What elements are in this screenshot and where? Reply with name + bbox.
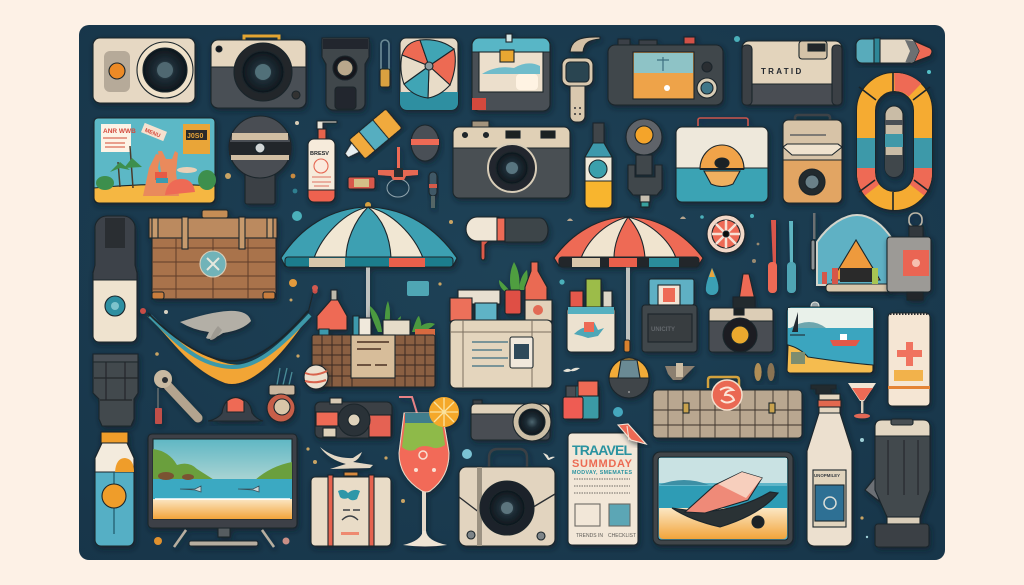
icon: teal beach umbrella (281, 202, 457, 330)
icon: large grey vintage camera (453, 121, 570, 198)
icon: beach poster: ANR WWB (103, 128, 136, 135)
icon: stacked red cards (563, 381, 599, 419)
icon: small marker pen (429, 172, 437, 208)
icon: cocktail glass with citrus (399, 397, 459, 546)
icon: tan camera backpack (783, 115, 842, 203)
decorative dots (154, 36, 931, 545)
icon: martini glass (848, 383, 876, 418)
icon: hammock (140, 288, 318, 384)
icon: seaside card (787, 302, 874, 373)
icon: striped ball (304, 365, 328, 389)
icon: round red shell (707, 215, 745, 253)
icon: boat on beach tablet (653, 452, 793, 545)
icon: first-aid notepad (888, 313, 930, 406)
icon: capsule tube (856, 38, 932, 63)
icon: beige document bag with supplies (450, 262, 552, 388)
icon: flip flops (754, 363, 775, 381)
icon: large cream bottle with label (807, 385, 852, 546)
icon: screen camera (608, 37, 723, 105)
icon: coral beach umbrella (554, 217, 703, 352)
icon: wooden chest (149, 210, 277, 299)
icon: blue tent (811, 213, 892, 292)
icon: large cream bottle with label: UNOPMILEY (814, 473, 840, 478)
icon: small red bar (348, 177, 375, 189)
icon: dark embossed case with cards (642, 279, 697, 352)
icon: wrist watch (562, 37, 600, 122)
icon: travel summary poster: TRAAVEL (572, 442, 632, 458)
icon: beach poster: J0S0 (187, 133, 203, 140)
icon: grey whale (180, 311, 251, 340)
icon: red compact camera (315, 398, 392, 438)
icon: white pipe capsule (466, 217, 548, 260)
icon: two-tone camera with yellow handle (211, 36, 306, 108)
icon: cream suitcase with face (311, 472, 391, 546)
icon: red tool with loop (378, 147, 418, 197)
icon: oval swim ring (859, 73, 930, 211)
icon: large camera with handle (459, 449, 555, 546)
icon: dark round hat (208, 398, 263, 421)
icon: camera lens stack (93, 354, 138, 426)
icon: grey canister device (887, 213, 931, 300)
icon: spiral snail device (267, 368, 295, 422)
icon: dark embossed case with cards: UNICITY (651, 327, 675, 333)
icon: dark flashlight device (322, 38, 369, 110)
icon: small bracket (665, 363, 695, 380)
icon: lotion pump bottle: BRESV (310, 151, 329, 157)
icon: striped sphere on stand (229, 116, 291, 204)
icon: bird plane (320, 447, 373, 469)
icon: travel summary poster: TRENDS IN (576, 533, 603, 539)
icon: rugged camera labelled TRATID: TRATID (761, 67, 804, 76)
icon: small lock tag (380, 40, 390, 87)
icon: small grey camera (471, 400, 551, 441)
icon: dark torch (626, 119, 662, 207)
icon: two paddles (768, 220, 796, 293)
icon: teal flask bottle (95, 432, 134, 546)
icon: travel summary poster: CHECKLIST (608, 533, 636, 539)
icon: beach monitor (148, 434, 297, 547)
icon: lotion pump bottle (308, 121, 337, 202)
icon: travel summary poster: MODVAY, SMEMATES (572, 470, 632, 476)
icon: rugged camera labelled TRATID (742, 41, 842, 105)
icon: glass cooler with hat (676, 118, 768, 202)
icon: tilted orange and teal tube (340, 109, 402, 167)
icon: small coral parasol (618, 424, 646, 444)
icon: egg capsule (411, 125, 439, 161)
icon: yellow bottle (585, 123, 612, 208)
icon: travel summary poster (568, 433, 638, 545)
icon: supply box with cards (567, 279, 615, 352)
icon: umbrella card (400, 38, 458, 110)
icon: dark blender (865, 419, 930, 547)
icon: microphone flask (93, 216, 137, 342)
icon: wrench tool (154, 370, 198, 424)
icon: water drop (706, 268, 718, 295)
icon: camera with cone lens (709, 274, 773, 352)
icon: beach poster (94, 118, 216, 203)
icon: orb with orange panels (609, 358, 649, 398)
panel: dark gear board (79, 25, 945, 560)
icon: teal travel case (472, 34, 550, 111)
icon: picnic basket with supplies (312, 290, 435, 387)
icon: travel summary poster: SUMMDAY (572, 458, 633, 470)
icon: long tan tool case (653, 377, 802, 438)
icon: beige action camera (93, 38, 195, 103)
icon: beach poster: MENU (144, 128, 161, 139)
